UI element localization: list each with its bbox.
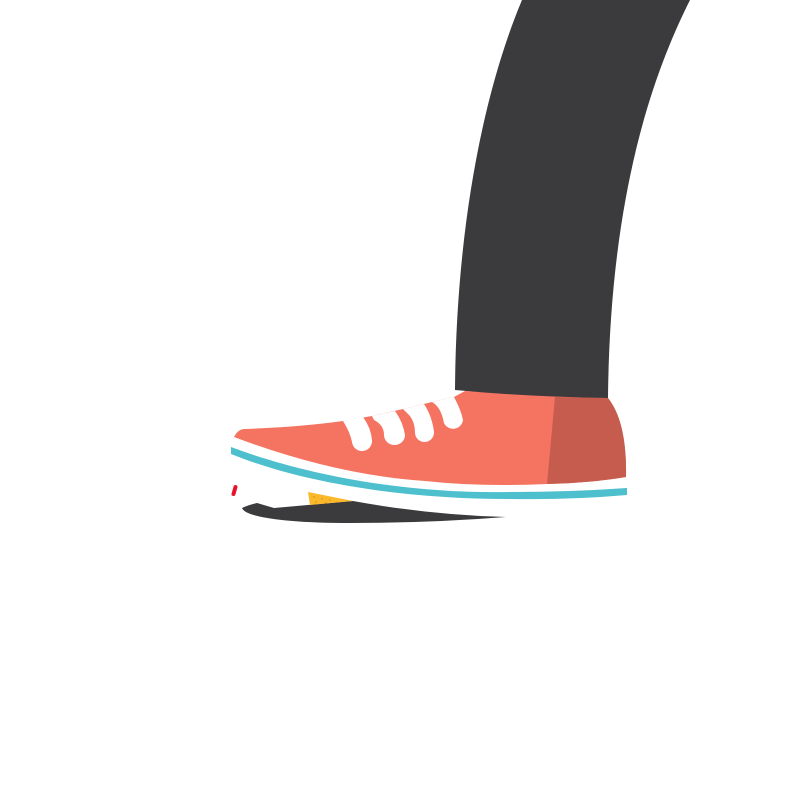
- yellow crumb: [308, 492, 353, 505]
- red mark: [234, 487, 236, 494]
- shoe upper: [234, 391, 626, 485]
- heel panel: [547, 397, 626, 484]
- teal sole stripe: [231, 447, 627, 499]
- trouser leg: [455, 0, 690, 398]
- sneaker: [231, 391, 627, 499]
- laces: [343, 397, 463, 451]
- shadow on ground: [242, 501, 506, 523]
